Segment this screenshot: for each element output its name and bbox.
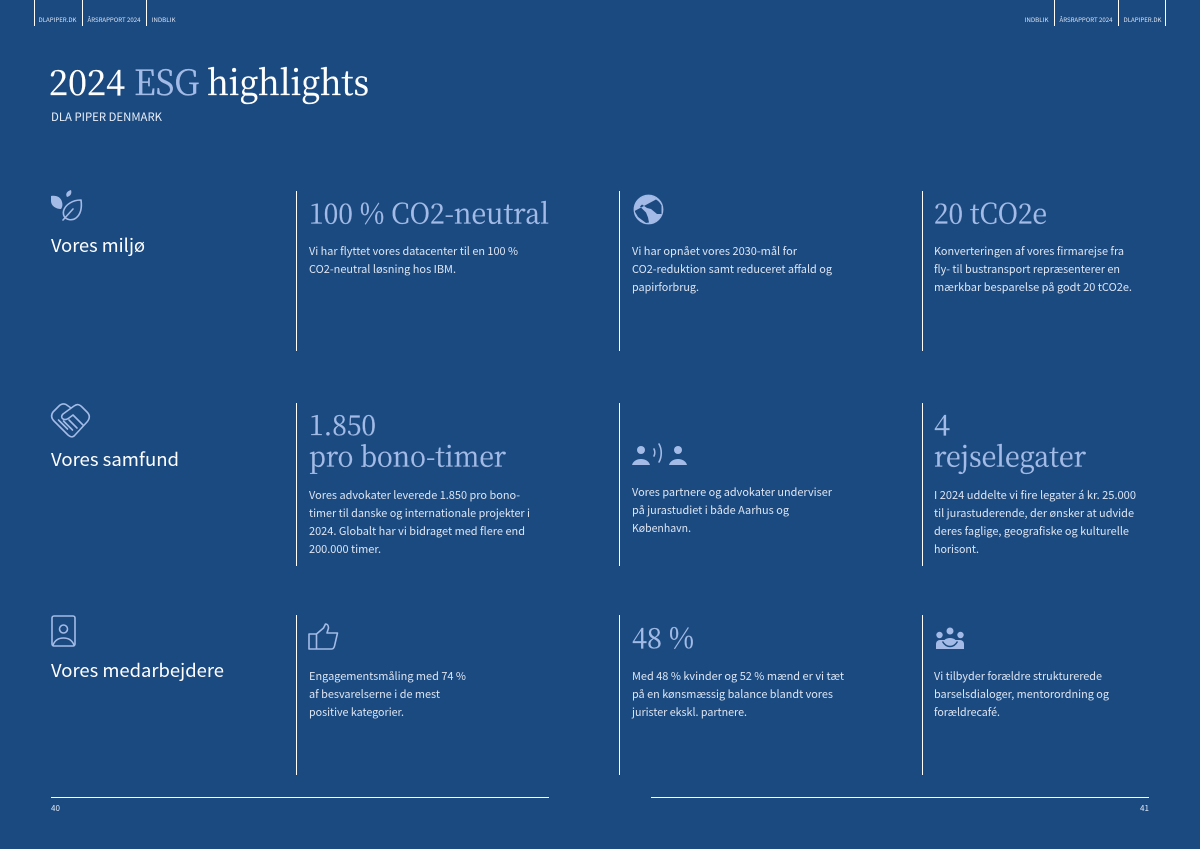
category label: Vores miljø bbox=[51, 232, 145, 258]
card: 2030-mål: papirforbrug. bbox=[632, 279, 699, 295]
card: 20 tCO2e: mærkbar besparelse på godt 20 tCO2e. bbox=[934, 279, 1132, 295]
header navigation left: INDBLIK bbox=[152, 15, 176, 24]
card: 20 tCO2e: Konverteringen af vores firmarejse fra bbox=[934, 243, 1124, 259]
card: undervisning bbox=[620, 403, 833, 566]
title: highlights bbox=[207, 56, 369, 106]
card: 2030-mål: Vi har opnået vores 2030-mål for bbox=[632, 243, 798, 259]
card: forældre: forældrecafé. bbox=[934, 704, 1000, 720]
card: undervisning: København. bbox=[632, 520, 691, 536]
footer left: 40 bbox=[51, 803, 61, 814]
card: undervisning: på jurastudiet i både Aarhus og bbox=[632, 502, 790, 518]
card: 4 rejselegater: til jurastuderende, der ønsker at udvide bbox=[934, 505, 1134, 521]
row: Vores samfund bbox=[51, 404, 179, 472]
card: forældre: Vi tilbyder forældre strukturerede bbox=[934, 668, 1102, 684]
card: 48 %: jurister ekskl. partnere. bbox=[631, 704, 747, 720]
card: 1.850 pro bono-timer: Vores advokater leverede 1.850 pro bono- bbox=[309, 487, 520, 503]
card: 1.850 pro bono-timer: 200.000 timer. bbox=[309, 541, 381, 557]
card: 100 % CO2-neutral: Vi har flyttet vores datacenter til en 100 % bbox=[309, 243, 518, 259]
icon: speaking people bbox=[632, 444, 687, 465]
category label: Vores samfund bbox=[51, 446, 179, 472]
title bbox=[49, 56, 369, 106]
card: 4 rejselegater bbox=[922, 403, 1136, 566]
header navigation right: ÅRSRAPPORT 2024 bbox=[1060, 15, 1113, 24]
header navigation right: INDBLIK bbox=[1024, 15, 1049, 24]
icon: handshake bbox=[52, 404, 89, 437]
card: 4 rejselegater: 4 bbox=[934, 404, 950, 444]
card: 2030-mål: CO2-reduktion samt reduceret affald og bbox=[632, 261, 833, 277]
card: forældre bbox=[922, 615, 1110, 775]
card: engagement bbox=[296, 615, 466, 775]
card: 1.850 pro bono-timer: 2024. Globalt har vi bidraget med flere end bbox=[309, 523, 525, 539]
card: undervisning: Vores partnere og advokater underviser bbox=[632, 484, 833, 500]
card: 48 %: 48 % bbox=[632, 617, 694, 657]
card: 48 %: på en kønsmæssig balance blandt vores bbox=[632, 686, 833, 702]
title: 2024 bbox=[49, 56, 125, 106]
header navigation right: DLAPIPER.DK bbox=[1124, 15, 1162, 24]
card: 1.850 pro bono-timer bbox=[296, 403, 530, 566]
card: 100 % CO2-neutral: 100 % CO2-neutral bbox=[309, 192, 549, 232]
icon: group of people bbox=[936, 628, 964, 649]
icon: portrait card bbox=[52, 616, 75, 646]
card: 48 %: Med 48 % kvinder og 52 % mænd er vi tæt bbox=[632, 668, 844, 684]
card: 1.850 pro bono-timer: timer til danske og internationale projekter i bbox=[309, 505, 530, 521]
title: ESG bbox=[134, 56, 199, 106]
icon: leaves bbox=[51, 190, 81, 220]
header navigation left: DLAPIPER.DK bbox=[38, 15, 77, 24]
card: engagement: af besvarelserne i de mest bbox=[309, 686, 440, 702]
subtitle: DLA PIPER DENMARK bbox=[51, 109, 163, 125]
card: 20 tCO2e: 20 tCO2e bbox=[934, 192, 1047, 232]
card: engagement: Engagementsmåling med 74 % bbox=[309, 668, 466, 684]
card: 20 tCO2e: fly- til bustransport repræsenterer en bbox=[934, 261, 1120, 277]
card: 20 tCO2e bbox=[922, 191, 1132, 351]
card: 2030-mål bbox=[620, 191, 833, 351]
icon: thumbs up bbox=[309, 624, 338, 649]
card: 100 % CO2-neutral bbox=[296, 191, 549, 351]
card: 100 % CO2-neutral: CO2-neutral løsning hos IBM. bbox=[309, 261, 456, 277]
card: 4 rejselegater: horisont. bbox=[934, 541, 979, 557]
header navigation left: ÅRSRAPPORT 2024 bbox=[88, 15, 141, 24]
header navigation right bbox=[1024, 0, 1166, 26]
row: Vores miljø bbox=[51, 190, 145, 258]
footer right: 41 bbox=[1140, 803, 1149, 814]
card: 4 rejselegater: I 2024 uddelte vi fire legater á kr. 25.000 bbox=[934, 487, 1136, 503]
card: 4 rejselegater: deres faglige, geografiske og kulturelle bbox=[934, 523, 1129, 539]
row: Vores medarbejdere bbox=[51, 616, 224, 683]
header navigation left bbox=[34, 0, 176, 26]
card: engagement: positive kategorier. bbox=[309, 704, 404, 720]
category label: Vores medarbejdere bbox=[51, 657, 224, 683]
card: 1.850 pro bono-timer: pro bono-timer bbox=[309, 436, 506, 476]
card: forældre: barselsdialoger, mentorordning og bbox=[934, 686, 1110, 702]
card: 1.850 pro bono-timer: 1.850 bbox=[309, 404, 376, 444]
card: 4 rejselegater: rejselegater bbox=[934, 436, 1086, 476]
card: 48 % bbox=[620, 615, 844, 775]
icon: globe bbox=[634, 195, 663, 224]
